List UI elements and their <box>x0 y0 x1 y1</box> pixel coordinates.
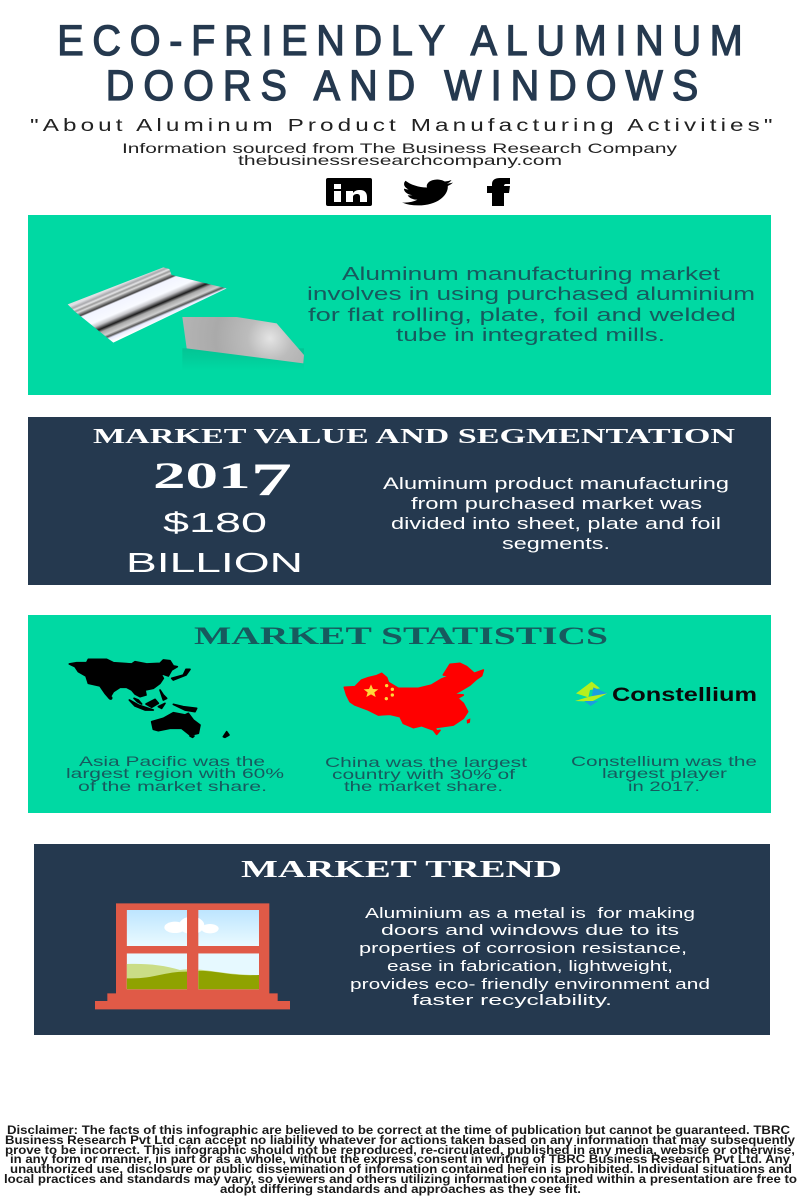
heading: MARKET TREND <box>241 857 562 883</box>
stat: 2017 market value: BILLION <box>126 547 303 578</box>
source note: thebusinessresearchcompany.com <box>238 152 562 168</box>
trend text: doors and windows due to its <box>381 922 679 939</box>
icon: window <box>95 903 290 1009</box>
trend text: properties of corrosion resistance, <box>359 940 687 957</box>
stat: constellium: in 2017. <box>628 778 700 794</box>
heading: MARKET VALUE AND SEGMENTATION <box>93 424 735 448</box>
stat: 2017 market value: 7 <box>251 454 292 506</box>
disclaimer: prove to be incorrect. This infographic should not be reproduced, re-circulated, published in any media, website or otherwise, <box>5 1145 795 1157</box>
intro text: tube in integrated mills. <box>396 325 665 345</box>
stat: constellium: largest player <box>602 765 727 781</box>
image: aluminium foil roll and plate <box>68 267 304 371</box>
panel: introduction <box>28 215 771 395</box>
flag star <box>364 684 378 697</box>
icon: twitter <box>402 179 453 205</box>
stat: china: the market share. <box>344 778 503 794</box>
logo: constellium: Constellium <box>612 685 757 706</box>
trend text: faster recyclability. <box>412 992 612 1009</box>
disclaimer: Business Research Pvt Ltd can accept no liability whatever for actions taken based on any information that may subsequently <box>5 1135 796 1147</box>
intro text: Aluminum manufacturing market <box>342 264 720 284</box>
stat: china: China was the largest <box>325 754 527 770</box>
disclaimer: in any form or manner, in part or as a whole, without the express consent in writing of TBRC Business Research Pvt Ltd. Any <box>10 1154 791 1166</box>
segmentation text: Aluminum product manufacturing <box>383 474 729 493</box>
stat: 2017 market value <box>126 454 303 578</box>
disclaimer <box>4 1125 797 1196</box>
trend text: Aluminium as a metal is for making <box>365 905 695 922</box>
disclaimer: local practices and standards may vary, so viewers and others utilizing information contained within a presentation are free to <box>4 1174 797 1186</box>
intro text: involves in using purchased aluminium <box>307 284 755 304</box>
stat: asia pacific: largest region with 60% <box>66 765 284 781</box>
stat: china <box>325 754 527 794</box>
stat: 2017 market value: 201 <box>153 456 208 497</box>
title: DOORS AND WINDOWS <box>106 61 698 109</box>
trend text <box>350 905 710 1009</box>
segmentation text <box>383 474 729 553</box>
intro text: for flat rolling, plate, foil and welded <box>308 305 736 325</box>
subtitle: "About Aluminum Product Manufacturing Activities" <box>30 115 773 135</box>
heading: MARKET STATISTICS <box>194 623 608 650</box>
panel: market statistics <box>28 615 771 813</box>
source note: Information sourced from The Business Research Company <box>122 140 677 156</box>
social icons <box>326 178 510 206</box>
source note <box>122 140 677 168</box>
stat: constellium: Constellium was the <box>571 753 757 769</box>
segmentation text: segments. <box>502 534 610 553</box>
icon: linkedin <box>326 178 372 206</box>
title <box>57 16 743 109</box>
segmentation text: from purchased market was <box>411 494 702 513</box>
title: ECO-FRIENDLY ALUMINUM <box>57 16 743 64</box>
intro text <box>307 264 755 345</box>
trend text: provides eco- friendly environment and <box>350 976 710 993</box>
stat: 2017 market value: $180 <box>163 507 267 538</box>
panel: market trend <box>34 844 770 1035</box>
stat: asia pacific: of the market share. <box>78 778 267 794</box>
stat: constellium <box>571 753 757 794</box>
map: asia pacific <box>69 659 229 737</box>
icon: facebook <box>487 178 510 206</box>
map: china <box>344 663 483 734</box>
stat: asia pacific: Asia Pacific was the <box>79 753 265 769</box>
logo: constellium <box>575 682 757 706</box>
trend text: ease in fabrication, lightweight, <box>387 958 673 975</box>
panel: market value and segmentation <box>28 417 771 585</box>
disclaimer: Disclaimer: The facts of this infographic are believed to be correct at the time of publication but cannot be guaranteed. TBRC <box>7 1125 790 1137</box>
stat: asia pacific <box>66 753 284 794</box>
stat: china: country with 30% of <box>332 766 515 782</box>
disclaimer: adopt differing standards and approaches as they see fit. <box>220 1184 581 1196</box>
segmentation text: divided into sheet, plate and foil <box>391 514 721 533</box>
disclaimer: unauthorized use, disclosure or public dissemination of information contained herein is prohibited. Individual situations and <box>10 1164 792 1176</box>
